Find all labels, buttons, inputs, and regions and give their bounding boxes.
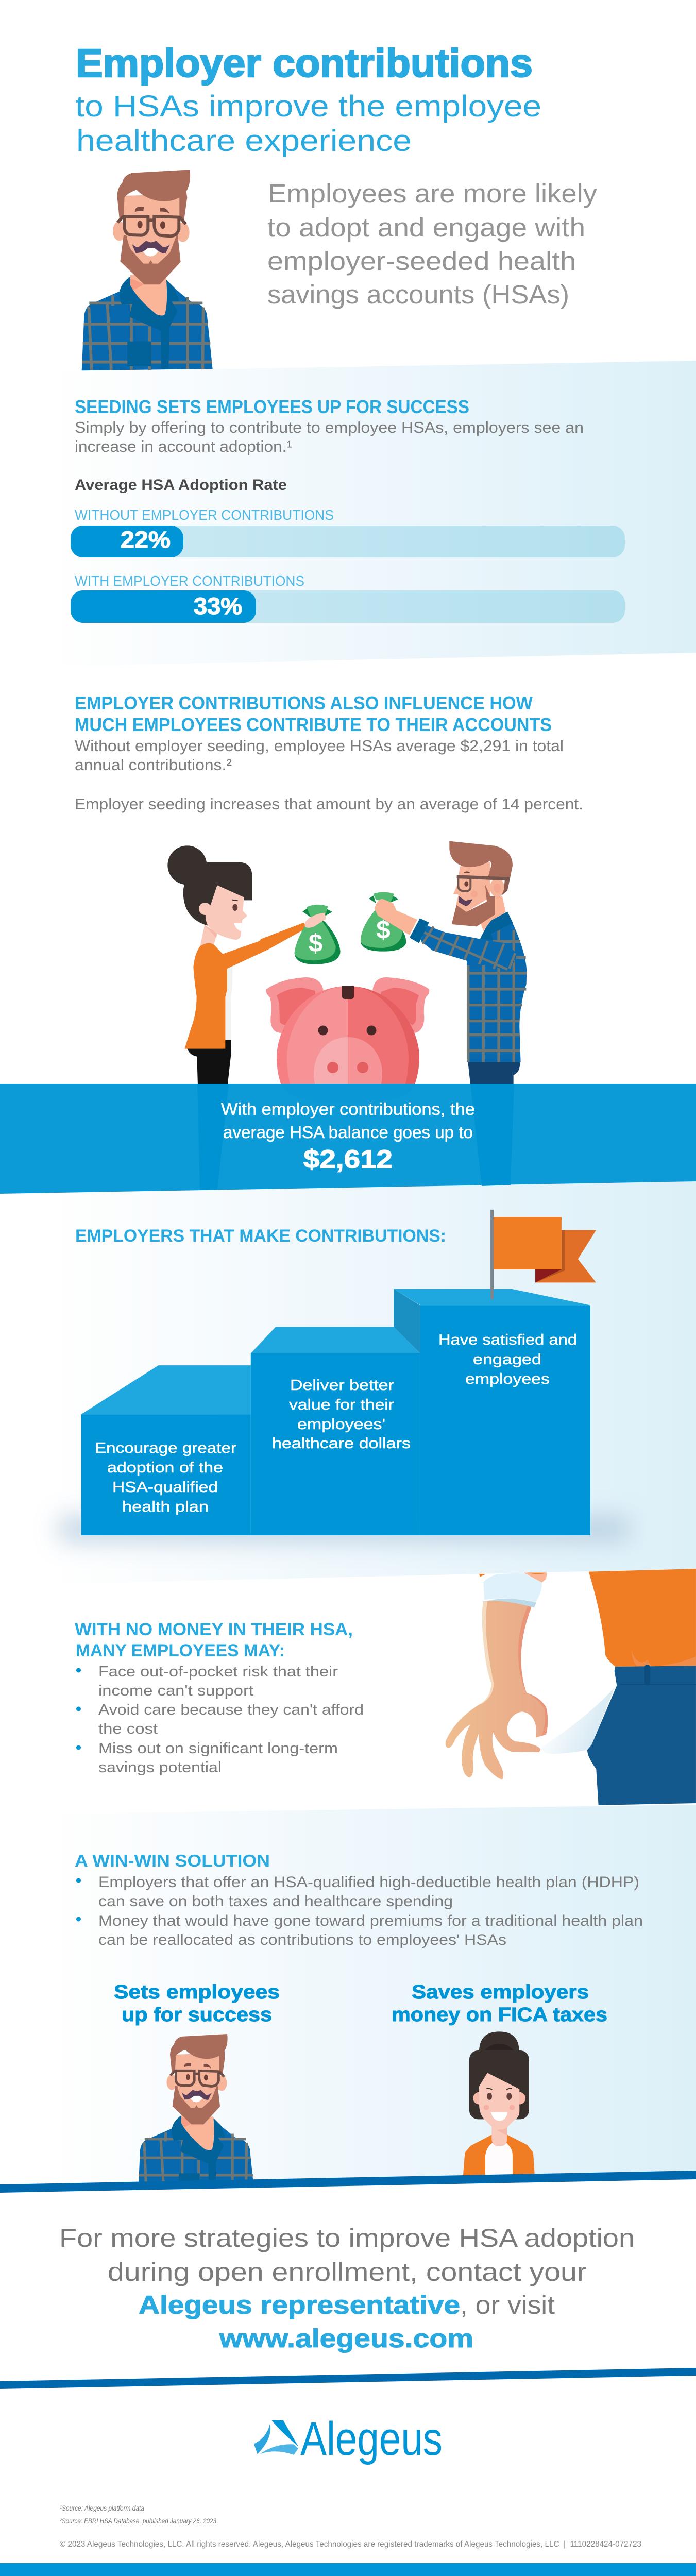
contributions body text: Employer seeding increases that amount by an average of 14 percent.	[75, 795, 583, 813]
heading: with no money	[75, 1620, 353, 1660]
callout band: average HSA balance: average HSA balance goes up to	[223, 1123, 473, 1142]
intro text block	[267, 179, 598, 309]
heading: contributions influence	[75, 692, 552, 735]
section: contributions influence	[75, 692, 583, 813]
divider bar: lower	[0, 2368, 696, 2389]
heading: contributions influence: MUCH EMPLOYEES CONTRIBUTE TO THEIR ACCOUNTS	[75, 714, 552, 735]
section: with no money	[75, 1620, 364, 1776]
step 3 text: engaged	[473, 1351, 541, 1368]
panel: win-win solution background	[0, 1805, 696, 2184]
intro text block: Employees are more likely	[268, 179, 598, 208]
illustration: piggy bank	[266, 977, 429, 1103]
icon: logo triangle	[254, 2420, 298, 2455]
white cover under portraits	[0, 2176, 696, 2210]
icon: money bag left: $	[309, 929, 322, 957]
chart title: Average HSA Adoption Rate	[75, 477, 287, 494]
title: to HSAs improve the employee	[75, 90, 541, 123]
bullet list: win-win	[76, 1874, 643, 1948]
seeding body text: increase in account adoption.¹	[75, 437, 292, 455]
illustration: empty pocket hand	[446, 1569, 696, 1805]
call to action: , or visit	[460, 2291, 555, 2319]
call to action: www.alegeus.com	[219, 2324, 473, 2353]
heading: with no money: MANY EMPLOYEES MAY:	[76, 1641, 285, 1660]
logo: Alegeus	[254, 2413, 443, 2465]
call to action: For more strategies to improve HSA adoption	[59, 2224, 635, 2252]
icon: money bag left	[295, 905, 341, 964]
step 1 text: health plan	[122, 1499, 209, 1515]
footnotes: ²Source: EBRI HSA Database, published January 26, 2023	[60, 2517, 216, 2525]
step 3 text: Have satisfied and	[438, 1332, 577, 1348]
callout band: average HSA balance: $2,612	[303, 1145, 393, 1174]
call to action	[59, 2224, 635, 2353]
seeding body text	[75, 418, 584, 455]
panel: employers that make contributions background	[0, 1181, 696, 1585]
bullet list: risks: Face out-of-pocket risk that their	[98, 1664, 338, 1680]
bullet list: risks: the cost	[98, 1721, 158, 1737]
icon: flag	[490, 1210, 596, 1299]
shadow under stairs	[59, 1517, 629, 1540]
bullet list: win-win: can save on both taxes and healthcare spending	[98, 1893, 453, 1910]
callout: sets employees up for success: Sets employees	[114, 1981, 280, 2003]
bullet list: risks: Miss out on significant long-term	[98, 1740, 338, 1757]
icon: money bag right: $	[376, 916, 391, 944]
callout: sets employees up for success: up for success	[122, 2004, 272, 2026]
call to action: Alegeus representative	[139, 2291, 460, 2319]
bullet list: win-win: Money that would have gone toward premiums for a traditional health plan	[98, 1912, 643, 1929]
title: healthcare experience	[76, 124, 412, 158]
logo: Alegeus: Alegeus	[300, 2413, 443, 2465]
title: Employer contributions	[76, 41, 533, 86]
bar chart: adoption rate: 22%	[121, 527, 171, 553]
step 3 text: employees	[465, 1371, 550, 1387]
step 2 text	[272, 1377, 411, 1452]
copyright: © 2023 Alegeus Technologies, LLC. All rights reserved. Alegeus, Alegeus Technologies are registered trademarks of Alegeus Technologies, LLC | 1110228424-072723	[60, 2540, 641, 2549]
intro text block: to adopt and engage with	[267, 213, 585, 242]
step 1 text: adoption of the	[107, 1460, 223, 1476]
footer bar	[0, 2563, 696, 2576]
bar chart: adoption rate: WITH EMPLOYER CONTRIBUTIONS	[75, 573, 304, 589]
step 1 text	[95, 1440, 236, 1515]
illustration: man with glasses	[82, 170, 213, 370]
illustration: woman with money bag	[167, 845, 341, 1086]
step 1 text: HSA-qualified	[112, 1479, 218, 1496]
heading: contributions influence: EMPLOYER CONTRIBUTIONS ALSO INFLUENCE HOW	[75, 692, 533, 714]
intro text block: savings accounts (HSAs)	[267, 280, 569, 309]
callout: sets employees up for success	[114, 1981, 280, 2026]
step 2 text: value for their	[289, 1397, 394, 1413]
heading: seeding: SEEDING SETS EMPLOYEES UP FOR SUCCESS	[75, 396, 469, 417]
step 2 text: healthcare dollars	[272, 1435, 411, 1452]
bullet list: risks: savings potential	[98, 1759, 222, 1776]
seeding body text: Simply by offering to contribute to employee HSAs, employers see an	[75, 418, 584, 436]
title	[75, 41, 541, 158]
bullet list: risks	[76, 1664, 364, 1776]
callout band: average HSA balance	[0, 1084, 696, 1194]
step 3 text	[438, 1332, 577, 1387]
contributions body text: annual contributions.²	[75, 756, 232, 774]
bar chart: adoption rate: 33%	[194, 593, 242, 619]
step 2 text: Deliver better	[290, 1377, 394, 1394]
icon: money bag right	[361, 892, 406, 952]
bullet list: risks: income can't support	[98, 1683, 253, 1699]
section: win-win solution	[75, 1851, 643, 2026]
call to action: during open enrollment, contact your	[108, 2258, 587, 2286]
callout band: average HSA balance: With employer contributions, the	[221, 1099, 475, 1118]
step 2 text: employees'	[297, 1416, 385, 1433]
bar chart: adoption rate	[71, 507, 625, 623]
footnotes	[60, 2504, 216, 2525]
callout: saves employers money	[392, 1981, 607, 2026]
step 1 text: Encourage greater	[95, 1440, 236, 1456]
heading: with no money: WITH NO MONEY IN THEIR HSA,	[75, 1620, 353, 1639]
bullet list: risks: Avoid care because they can't afford	[98, 1702, 364, 1718]
intro text block: employer-seeded health	[267, 246, 576, 276]
bullet list: win-win: Employers that offer an HSA-qualified high-deductible health plan (HDHP)	[98, 1874, 639, 1891]
illustration: man with money bag	[361, 841, 527, 1086]
staircase	[81, 1210, 596, 1535]
illustration: man portrait small	[138, 2034, 255, 2199]
bullet list: win-win: can be reallocated as contributions to employees' HSAs	[98, 1931, 506, 1948]
panel: seeding sets employees up for success	[71, 396, 625, 623]
heading: win-win solution: A WIN-WIN SOLUTION	[75, 1851, 270, 1870]
footnotes: ¹Source: Alegeus platform data	[60, 2504, 144, 2512]
callout: saves employers money: Saves employers	[412, 1981, 589, 2003]
bar chart: adoption rate: WITHOUT EMPLOYER CONTRIBUTIONS	[75, 507, 334, 523]
contributions body text: Without employer seeding, employee HSAs average $2,291 in total	[75, 737, 564, 755]
panel: seeding background	[0, 361, 696, 667]
heading: employers that make contributions: EMPLOYERS THAT MAKE CONTRIBUTIONS:	[75, 1226, 446, 1246]
illustration: woman portrait small	[463, 2031, 535, 2179]
contributions body text	[75, 737, 583, 813]
divider bar: upper	[0, 2171, 696, 2193]
callout: saves employers money: money on FICA taxes	[392, 2004, 607, 2026]
